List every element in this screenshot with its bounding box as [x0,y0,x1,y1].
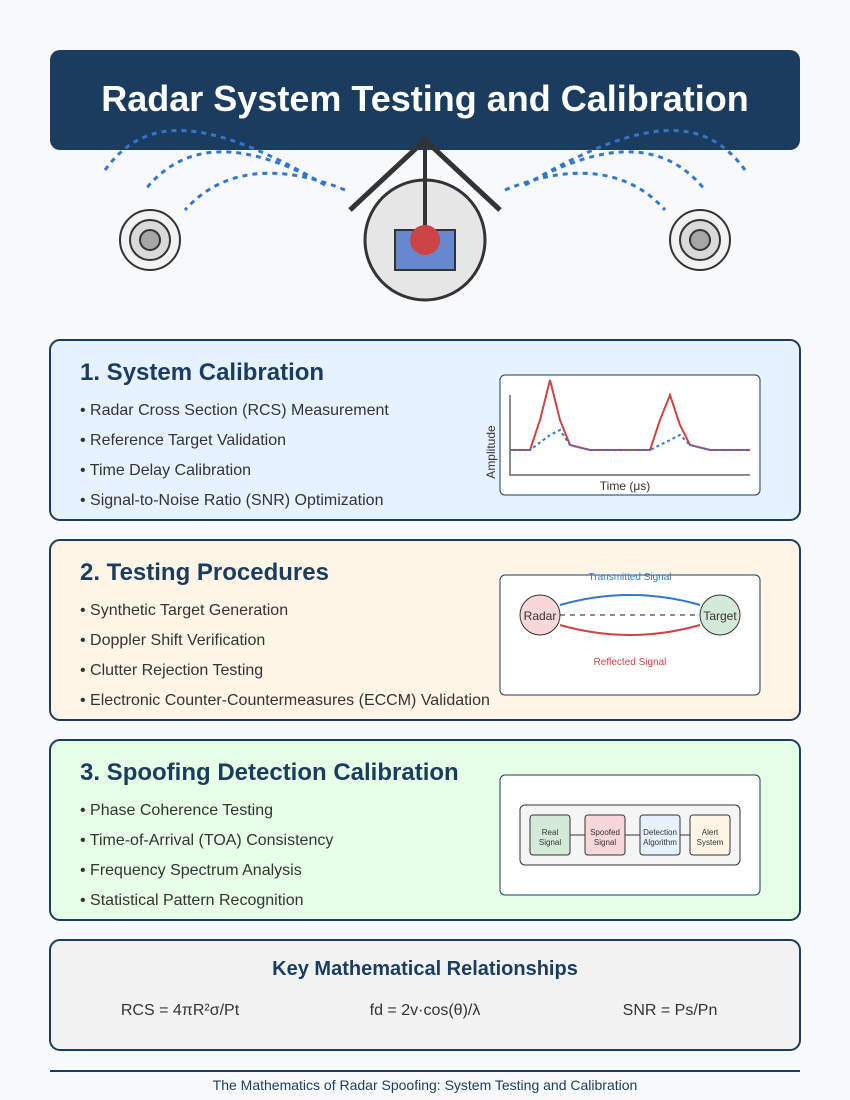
radar waves right [505,130,745,210]
diagram: radar and target signals: Transmitted Signal [588,572,672,583]
list: calibration items: • Radar Cross Section (RCS) Measurement [80,402,389,419]
list: testing items: • Synthetic Target Generation [80,602,288,619]
radar illustration [105,130,745,300]
diagram: detection flow: Signal [539,838,561,847]
list: testing items: • Doppler Shift Verification [80,632,265,649]
diagram: detection flow: Signal [594,838,616,847]
diagram: radar and target signals: Radar [524,609,556,623]
list: calibration items: • Reference Target Validation [80,432,286,449]
radar waves left [105,130,345,210]
diagram: detection flow: Real [542,828,558,837]
icon: right target dish [670,210,730,270]
list: spoofing items: • Frequency Spectrum Analysis [80,862,302,879]
panel: testing procedures [50,540,800,720]
chart: amplitude over time [484,375,760,495]
panel: spoofing detection calibration [50,740,800,920]
icon: central radar antenna [350,140,500,300]
heading: key relationships: Key Mathematical Relationships [272,958,578,980]
list: calibration items [80,402,389,509]
formula: Doppler: fd = 2v·cos(θ)/λ [370,1002,480,1019]
heading: spoofing detection: 3. Spoofing Detection Calibration [80,759,459,786]
heading: system calibration: 1. System Calibration [80,359,324,386]
diagram: detection flow: Algorithm [643,838,677,847]
panel: system calibration [50,340,800,520]
list: testing items: • Clutter Rejection Testing [80,662,263,679]
footer caption: The Mathematics of Radar Spoofing: System Testing and Calibration [213,1077,637,1093]
heading: testing procedures: 2. Testing Procedures [80,559,329,586]
list: calibration items: • Signal-to-Noise Ratio (SNR) Optimization [80,492,383,509]
formula: SNR: SNR = Ps/Pn [623,1002,717,1019]
diagram: radar and target signals: Target [703,609,737,623]
diagram: radar and target signals [500,572,760,695]
diagram: detection flow: System [697,838,724,847]
chart: amplitude over time: Amplitude [484,425,498,479]
title banner [50,50,800,150]
panel: key mathematical relationships [50,940,800,1050]
diagram: detection flow: Alert [702,828,719,837]
diagram: detection flow: Spoofed [590,828,620,837]
list: spoofing items: • Time-of-Arrival (TOA) Consistency [80,832,333,849]
diagram: radar and target signals: Reflected Signal [594,657,666,668]
list: calibration items: • Time Delay Calibration [80,462,251,479]
list: testing items: • Electronic Counter-Countermeasures (ECCM) Validation [80,692,490,709]
list: testing items [80,602,490,709]
list: spoofing items [80,802,333,909]
diagram: detection flow: Detection [643,828,677,837]
diagram: detection flow [500,775,760,895]
chart: amplitude over time: Time (μs) [600,479,650,493]
formula: RCS: RCS = 4πR²σ/Pt [121,1002,240,1019]
icon: left target dish [120,210,180,270]
list: spoofing items: • Statistical Pattern Recognition [80,892,304,909]
title: Radar System Testing and Calibration [101,78,749,119]
list: spoofing items: • Phase Coherence Testing [80,802,273,819]
